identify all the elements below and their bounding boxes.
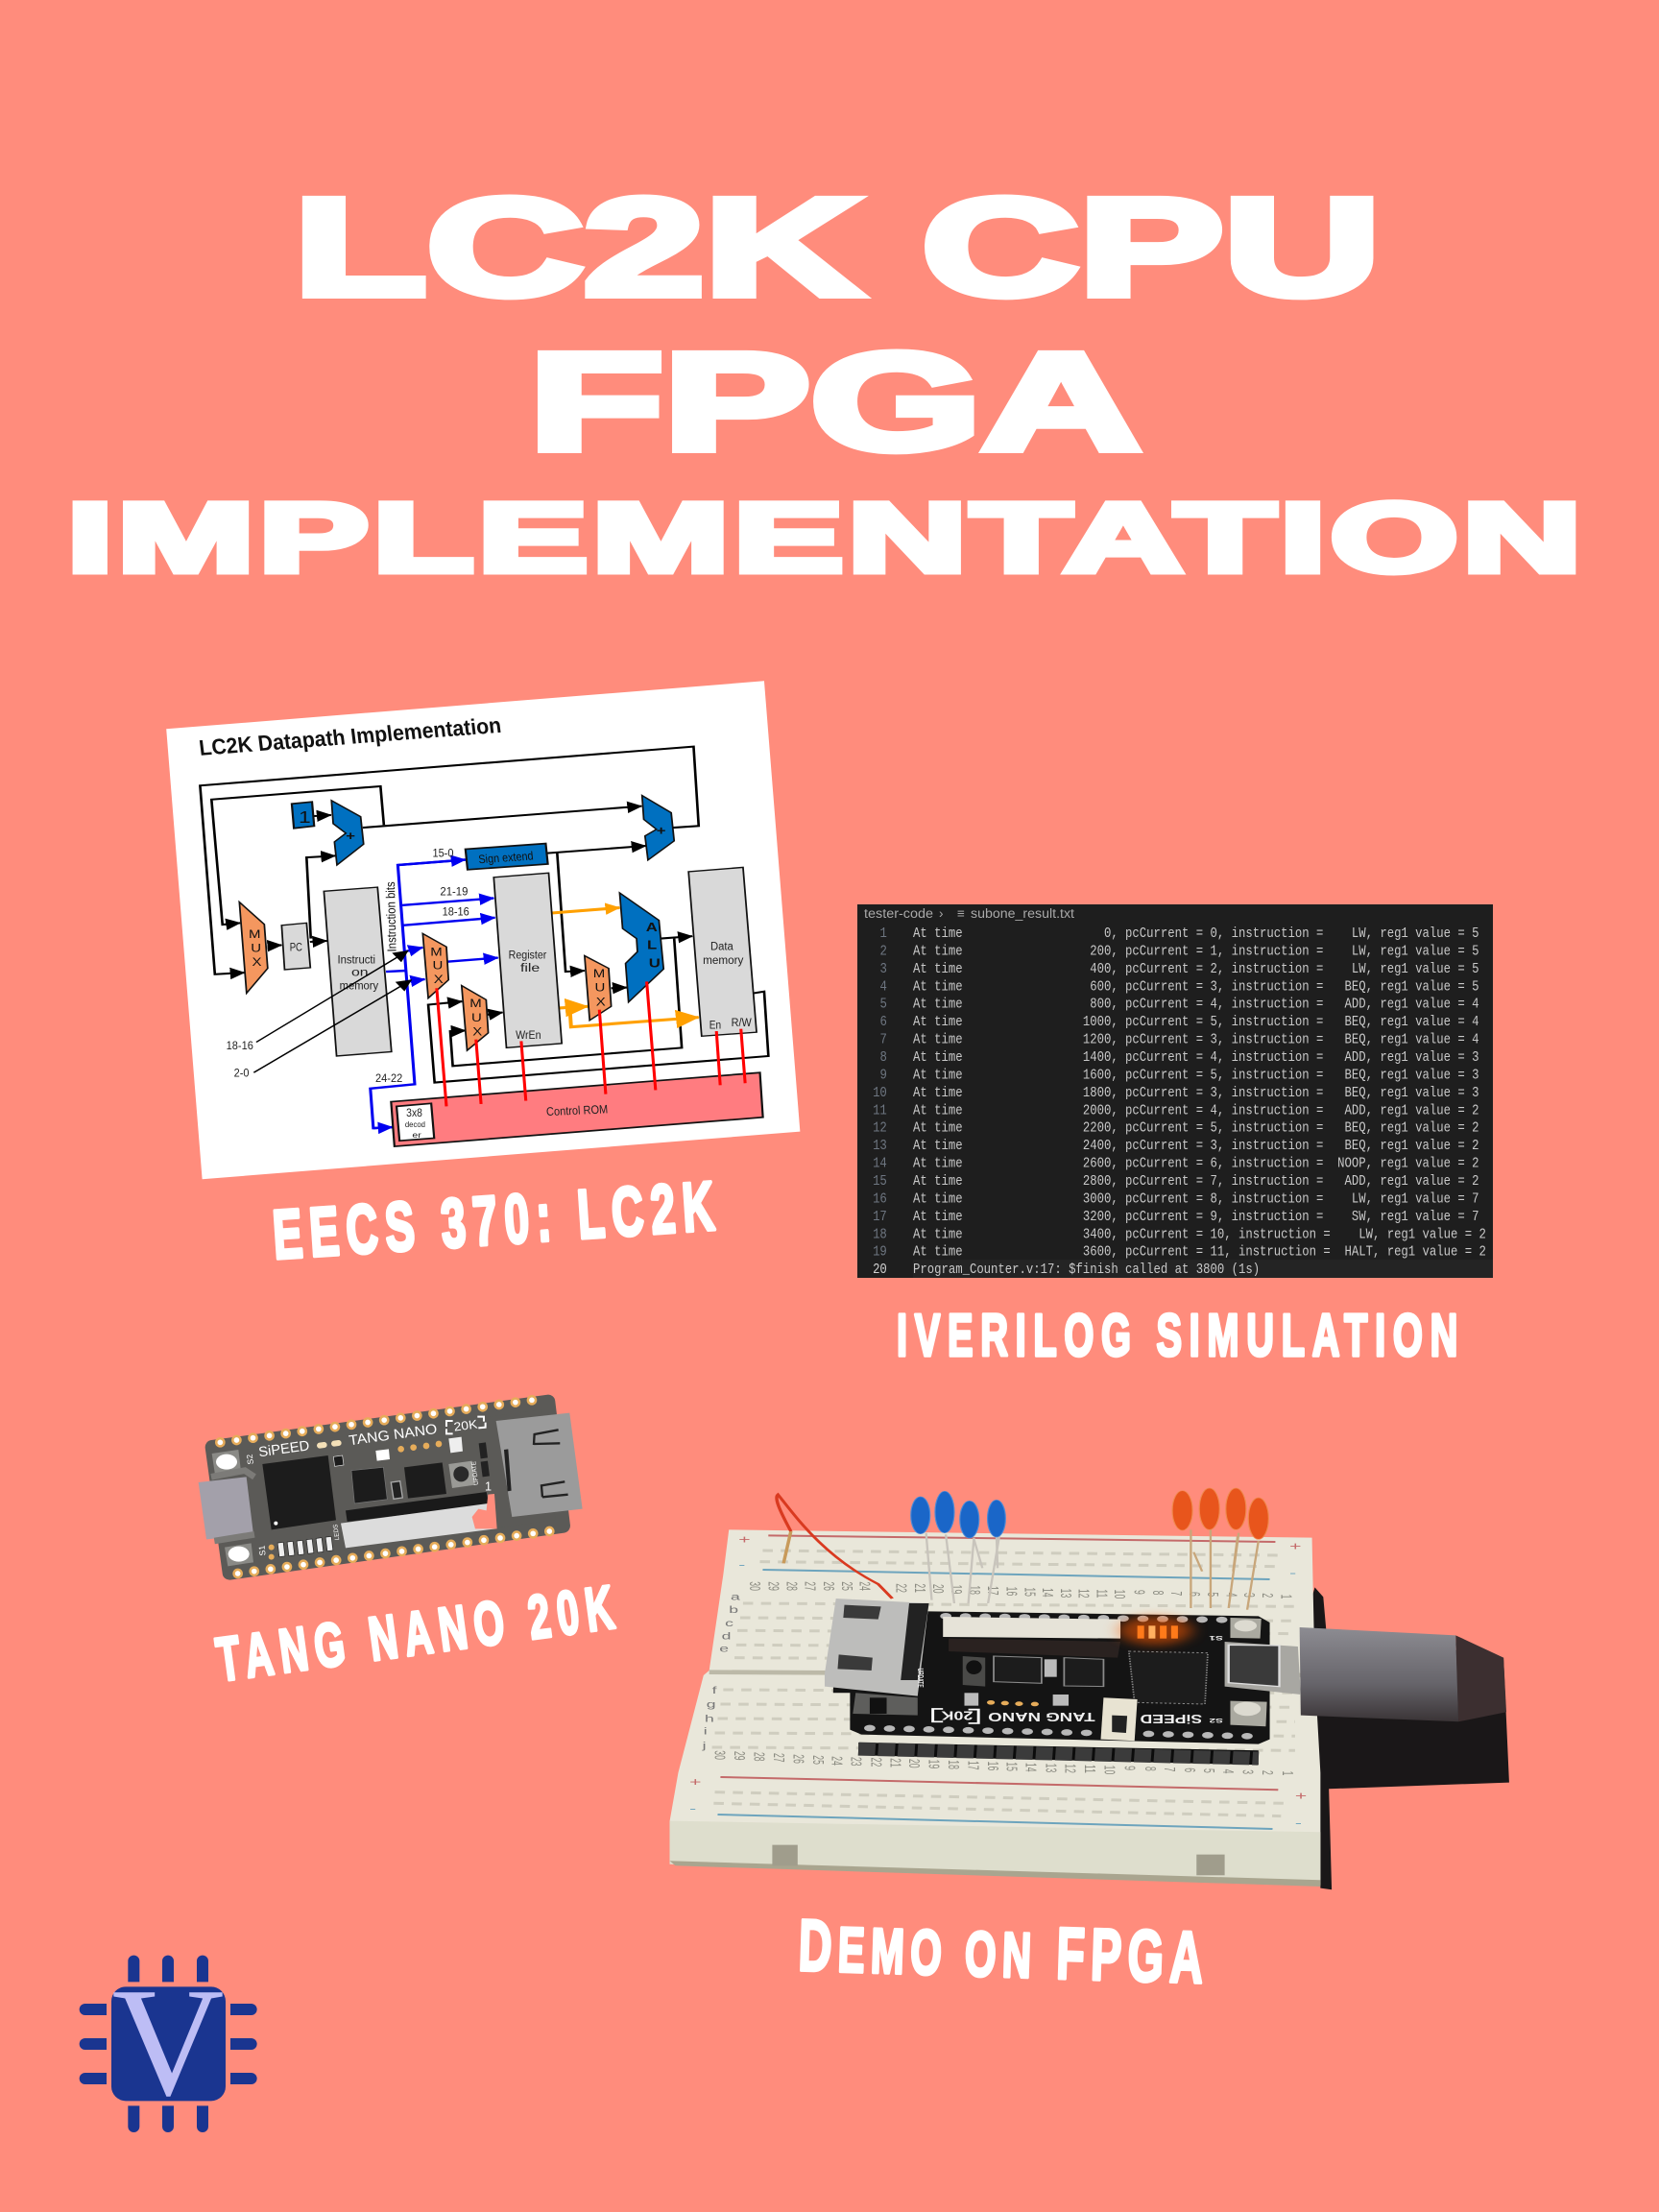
column numbers top: 5: [1204, 1592, 1221, 1597]
bit field labels: 15-0: [432, 847, 454, 860]
row letters: j: [701, 1741, 707, 1751]
line numbers: [873, 926, 887, 1279]
column numbers bottom: 24: [829, 1756, 845, 1766]
block: data memory: [688, 867, 757, 1036]
line numbers: 13: [873, 1139, 887, 1155]
board pin holes: [870, 1616, 1247, 1736]
letter V: V: [112, 1957, 224, 2128]
power rails: [717, 1535, 1278, 1829]
column numbers bottom: 17: [965, 1761, 981, 1770]
block: ALU: L: [647, 938, 657, 952]
front notches: [772, 1845, 1225, 1875]
block: ALU mux: M: [593, 967, 605, 980]
simulation log lines: At time 0, pcCurrent = 0, instruction = LW, reg1 value = 5: [913, 926, 1479, 942]
PCB: [212, 1402, 564, 1573]
memory chip: [351, 1467, 387, 1503]
block: register mux: U: [432, 959, 443, 972]
block: constant 1: [292, 802, 314, 829]
line numbers: 20: [873, 1262, 887, 1279]
silkscreen text, upside down: 20K: [941, 1709, 973, 1722]
column numbers top: 28: [783, 1581, 800, 1591]
column numbers top: 9: [1131, 1590, 1147, 1595]
column numbers bottom: 7: [1161, 1767, 1177, 1772]
block: control ROM: er: [412, 1131, 421, 1140]
simulation log lines: At time 200, pcCurrent = 1, instruction = LW, reg1 value = 5: [913, 945, 1479, 960]
silkscreen text: S2: [245, 1454, 255, 1465]
block: control ROM: Control ROM: [546, 1103, 609, 1119]
FPC connector: [341, 1492, 497, 1548]
simulation log lines: At time 2800, pcCurrent = 7, instruction = ADD, reg1 value = 2: [913, 1174, 1479, 1190]
column numbers top: 22: [893, 1583, 909, 1593]
column numbers bottom: 5: [1200, 1768, 1216, 1773]
active line highlight: [913, 1260, 1493, 1278]
row letters: b: [729, 1605, 738, 1616]
onboard LED glow: [1118, 1616, 1192, 1645]
update button: [963, 1656, 985, 1687]
column numbers top: 14: [1039, 1588, 1056, 1598]
title: [67, 170, 1586, 592]
block: write mux: [462, 986, 489, 1050]
channel between halves: [709, 1672, 1314, 1675]
label: instruction bits: Instruction bits: [383, 881, 399, 952]
JST connector: [1101, 1697, 1138, 1741]
block: data memory: Data: [710, 940, 733, 953]
column numbers top: 6: [1187, 1592, 1203, 1597]
column numbers bottom: 8: [1142, 1767, 1158, 1771]
flash chip: [404, 1462, 446, 1499]
row letters: f: [712, 1686, 717, 1696]
silkscreen text: SiPEED: [257, 1438, 310, 1460]
file breadcrumb: ≡: [957, 906, 965, 921]
chip body: [111, 1986, 226, 2101]
block: PC mux: U: [251, 942, 261, 954]
row letters: [701, 1592, 740, 1751]
black wires: [200, 747, 768, 1083]
bit field labels: 18-16: [443, 905, 469, 919]
column numbers top: 25: [838, 1581, 855, 1591]
rail signs: +: [1289, 1539, 1301, 1552]
rail signs: -: [1289, 1566, 1296, 1579]
column numbers bottom: 30: [711, 1750, 728, 1760]
title line: IMPLEMENTATION: IMPLEMENTATION: [67, 483, 1586, 592]
simulation log lines: [913, 926, 1486, 1279]
line numbers: 10: [873, 1086, 887, 1101]
column numbers bottom: 18: [945, 1760, 962, 1769]
label: Demo on FPGA: DEMO ON FPGA: [797, 1905, 1211, 1999]
block: data memory: R/W: [732, 1016, 752, 1029]
column numbers bottom: 25: [810, 1755, 827, 1765]
line numbers: 18: [873, 1228, 887, 1243]
column numbers top: 24: [856, 1581, 873, 1591]
HDMI connector: [496, 1413, 583, 1517]
column numbers top: 1: [1278, 1595, 1294, 1599]
line numbers: 12: [873, 1121, 887, 1137]
blue LEDs: [911, 1491, 1005, 1603]
panel: breadboard demo photo: [670, 1488, 1509, 1889]
block: PC mux: M: [249, 927, 260, 940]
rail signs: -: [689, 1801, 696, 1815]
FPC connector: [943, 1617, 1120, 1658]
bit field labels: 18-16: [227, 1040, 253, 1053]
block: register mux: [422, 933, 448, 998]
panel: iverilog simulation output: [857, 904, 1493, 1279]
block: register mux: X: [434, 974, 444, 986]
USB-C connector: [199, 1471, 254, 1541]
row letters: i: [704, 1726, 708, 1737]
column numbers top: 3: [1240, 1593, 1258, 1598]
column numbers bottom: 1: [1279, 1771, 1296, 1776]
tactile buttons S1 S2: [212, 1450, 253, 1566]
block: data memory: En: [709, 1019, 721, 1032]
block: branch adder: +: [657, 824, 666, 838]
row letters: c: [725, 1619, 733, 1629]
silkscreen text: 1: [485, 1480, 492, 1494]
column numbers top: 16: [1003, 1587, 1020, 1596]
simulation log lines: At time 2000, pcCurrent = 4, instruction = ADD, reg1 value = 2: [913, 1104, 1479, 1119]
simulation log lines: At time 3600, pcCurrent = 11, instruction = HALT, reg1 value = 2: [913, 1245, 1486, 1261]
column numbers bottom: 29: [731, 1751, 748, 1761]
red control lines: [437, 981, 745, 1106]
row letters: h: [705, 1714, 714, 1724]
terminal background: [857, 904, 1493, 1278]
silkscreen text: TANG NANO: [348, 1422, 438, 1449]
simulation log lines: At time 400, pcCurrent = 2, instruction = LW, reg1 value = 5: [913, 962, 1479, 977]
breadboard body: [670, 1529, 1320, 1885]
diagram heading: LC2K Datapath Implementation: [198, 712, 503, 760]
block: sign extend: [466, 844, 548, 870]
line numbers: 1: [879, 926, 887, 942]
silkscreen text, upside down: UPDATE: [915, 1669, 924, 1688]
simulation log lines: At time 1400, pcCurrent = 4, instruction = ADD, reg1 value = 3: [913, 1050, 1479, 1066]
line numbers: 17: [873, 1210, 887, 1225]
line numbers: 9: [879, 1069, 887, 1084]
column numbers bottom: 11: [1081, 1765, 1098, 1773]
line numbers: 2: [879, 945, 887, 960]
simulation log lines: At time 2200, pcCurrent = 5, instruction = BEQ, reg1 value = 2: [913, 1121, 1479, 1137]
block: write mux: M: [469, 997, 482, 1010]
block: register file: file: [520, 962, 540, 975]
paper: [166, 681, 800, 1179]
user LEDs: [277, 1536, 333, 1557]
bit field labels: 24-22: [375, 1071, 402, 1085]
gold pads: [987, 1700, 1039, 1706]
column numbers bottom: 2: [1259, 1770, 1275, 1775]
block: ALU: U: [649, 956, 661, 971]
simulation log lines: Program_Counter.v:17: $finish called at 3800 (1s): [913, 1262, 1260, 1279]
block: control ROM: decod: [405, 1120, 425, 1130]
column numbers bottom: 21: [887, 1758, 903, 1767]
row letters: g: [707, 1699, 716, 1710]
20K bracket: [933, 1709, 978, 1723]
column numbers bottom: 19: [926, 1760, 942, 1768]
pin header: [858, 1743, 1259, 1765]
blue wires: [371, 860, 498, 1128]
breadboard holes: [712, 1551, 1295, 1816]
tactile buttons: [1230, 1618, 1267, 1726]
column numbers top: 20: [930, 1584, 947, 1594]
block: PC adder: [331, 801, 364, 865]
column numbers bottom: 20: [905, 1759, 923, 1768]
silkscreen text: LEDS: [332, 1524, 341, 1541]
silkscreen text: [245, 1417, 492, 1556]
simulation log lines: At time 1200, pcCurrent = 3, instruction = BEQ, reg1 value = 4: [913, 1033, 1479, 1048]
block: PC mux: X: [252, 956, 262, 969]
column numbers bottom: 9: [1121, 1766, 1138, 1770]
label: EECS 370: LC2K: EECS 370: LC2K: [271, 1167, 724, 1274]
panel: Tang Nano 20K board render: [199, 1400, 583, 1574]
simulation log lines: At time 2600, pcCurrent = 6, instruction = NOOP, reg1 value = 2: [913, 1157, 1479, 1172]
simulation log lines: At time 600, pcCurrent = 3, instruction = BEQ, reg1 value = 5: [913, 980, 1479, 996]
line numbers: 19: [873, 1245, 887, 1261]
rail signs: -: [1295, 1815, 1302, 1829]
panel: LC2K datapath diagram: [166, 681, 800, 1179]
line numbers: 7: [879, 1033, 887, 1048]
simulation log lines: At time 3000, pcCurrent = 8, instruction = LW, reg1 value = 7: [913, 1192, 1479, 1208]
block: PC: PC: [290, 941, 302, 954]
title line: FPGA: FPGA: [529, 325, 1141, 479]
block: ALU mux: U: [594, 981, 605, 994]
block: register file: Register: [509, 949, 546, 962]
label: TANG NANO 20K: TANG NANO 20K: [212, 1572, 625, 1695]
USB-C connector: [1225, 1642, 1301, 1695]
20K bracket: [446, 1417, 486, 1433]
block: branch adder: [642, 796, 674, 860]
block: write mux: X: [472, 1025, 482, 1038]
line numbers: 3: [879, 962, 887, 977]
column numbers bottom: 22: [868, 1758, 884, 1767]
USB-C opening: [1229, 1645, 1280, 1687]
logo: chip with letter V: [80, 1956, 257, 2132]
rail signs: [689, 1532, 1307, 1829]
rail signs: +: [1295, 1789, 1307, 1802]
pin holes: [220, 1400, 550, 1574]
file breadcrumb: subone_result.txt: [971, 906, 1074, 921]
column numbers bottom: [711, 1750, 1296, 1776]
column numbers top: 30: [746, 1581, 762, 1591]
simulation log lines: At time 2400, pcCurrent = 3, instruction = BEQ, reg1 value = 2: [913, 1139, 1479, 1155]
silkscreen text: UPDATE: [470, 1460, 480, 1485]
title line: LC2K CPU: LC2K CPU: [294, 170, 1381, 325]
column numbers bottom: 28: [751, 1752, 767, 1762]
column numbers bottom: 10: [1101, 1766, 1118, 1774]
block: write mux: U: [471, 1011, 482, 1023]
block: data memory: memory: [703, 954, 744, 968]
column numbers top: 21: [911, 1583, 927, 1593]
gold pads: [269, 1441, 442, 1560]
block: control ROM: 3x8: [406, 1107, 422, 1119]
red jumper wire: [777, 1495, 892, 1599]
block: ALU: [619, 893, 663, 1002]
column numbers bottom: 26: [790, 1754, 806, 1764]
line numbers: 5: [879, 998, 887, 1013]
column numbers top: 13: [1057, 1589, 1073, 1598]
block: control ROM: [391, 1072, 763, 1146]
dark shadow behind board: [1312, 1587, 1509, 1889]
orange wires: [552, 907, 699, 1027]
line numbers: 6: [879, 1015, 887, 1031]
block: register file: WrEn: [516, 1029, 541, 1043]
silkscreen text, upside down: S2: [1209, 1717, 1223, 1724]
simulation log lines: At time 3400, pcCurrent = 10, instruction = LW, reg1 value = 2: [913, 1228, 1486, 1243]
column numbers top: 17: [984, 1586, 1001, 1596]
silkscreen text, upside down: S1: [1209, 1634, 1223, 1642]
block: ALU mux: X: [596, 996, 606, 1008]
column numbers bottom: 27: [770, 1753, 787, 1763]
diagonal immediate wires: [253, 950, 411, 1072]
block: register mux: M: [430, 946, 443, 958]
column numbers top: 19: [948, 1585, 965, 1594]
silkscreen text: S1: [256, 1545, 268, 1556]
column numbers bottom: 14: [1022, 1763, 1039, 1772]
line numbers: 4: [879, 980, 887, 996]
block: PC adder: +: [346, 829, 355, 843]
column numbers top: 7: [1167, 1591, 1184, 1596]
HDMI socket: [825, 1599, 929, 1716]
column numbers bottom: 3: [1239, 1769, 1256, 1774]
chip pins: [80, 1956, 257, 2132]
breadboard front face: [670, 1821, 1320, 1885]
column numbers top: 15: [1022, 1587, 1038, 1597]
line numbers: 14: [873, 1157, 887, 1172]
column numbers top: 10: [1111, 1590, 1128, 1599]
block: register file: [493, 873, 562, 1047]
column numbers top: 18: [966, 1585, 982, 1595]
column numbers top: 29: [765, 1581, 781, 1591]
row letters: a: [731, 1592, 740, 1602]
block: constant 1: 1: [299, 807, 311, 827]
small components: [333, 1437, 490, 1499]
update button: [448, 1461, 475, 1488]
silkscreen text, upside down: TANG NANO: [988, 1710, 1095, 1723]
column numbers bottom: 15: [1003, 1762, 1020, 1771]
column numbers top: 8: [1149, 1591, 1166, 1596]
simulation log lines: At time 1600, pcCurrent = 5, instruction = BEQ, reg1 value = 3: [913, 1069, 1479, 1084]
column numbers bottom: 4: [1219, 1769, 1236, 1774]
block: PC mux: [239, 902, 268, 993]
simulation log lines: At time 3200, pcCurrent = 9, instruction = SW, reg1 value = 7: [913, 1210, 1479, 1225]
column numbers top: 12: [1075, 1589, 1092, 1599]
column numbers bottom: 16: [984, 1762, 1001, 1770]
FPGA board: [833, 1606, 1270, 1744]
silkscreen text, upside down: [915, 1634, 1223, 1725]
USB cable plug: [1300, 1627, 1506, 1721]
rail signs: -: [738, 1557, 745, 1571]
bit field labels: [227, 847, 469, 1085]
column numbers top: 27: [802, 1581, 818, 1591]
rail signs: +: [689, 1775, 701, 1789]
block: sign extend: Sign extend: [478, 850, 534, 867]
main FPGA chip: [262, 1455, 336, 1529]
rail signs: +: [738, 1532, 751, 1546]
file breadcrumb: ›: [939, 906, 943, 921]
row letters: d: [722, 1631, 731, 1642]
simulation log lines: At time 1000, pcCurrent = 5, instruction = BEQ, reg1 value = 4: [913, 1015, 1479, 1031]
block: instruction memory: on: [351, 966, 369, 979]
line numbers: 15: [873, 1174, 887, 1190]
block: instruction memory: [324, 887, 392, 1056]
bit field labels: 21-19: [440, 885, 469, 899]
column numbers top: 2: [1259, 1593, 1275, 1598]
block: ALU mux: [585, 955, 612, 1021]
column numbers top: 11: [1094, 1589, 1110, 1598]
file breadcrumb: tester-code: [864, 906, 933, 921]
row letters: e: [719, 1644, 729, 1654]
column numbers bottom: 13: [1043, 1764, 1059, 1772]
orange LEDs: [1172, 1488, 1268, 1610]
simulation log lines: At time 800, pcCurrent = 4, instruction = ADD, reg1 value = 4: [913, 998, 1479, 1013]
silkscreen text, upside down: SiPEED: [1141, 1712, 1202, 1725]
silver components: [965, 1659, 1069, 1706]
line numbers: 8: [879, 1050, 887, 1066]
column numbers bottom: 23: [848, 1757, 864, 1767]
block: PC: [281, 923, 310, 970]
breadboard bottom edge: [670, 1861, 1320, 1887]
column numbers top: 26: [820, 1581, 836, 1591]
chips: [994, 1651, 1208, 1704]
column numbers bottom: 6: [1181, 1767, 1197, 1772]
bit field labels: 2-0: [234, 1067, 250, 1080]
block: ALU: A: [646, 921, 658, 934]
simulation log lines: At time 1800, pcCurrent = 3, instruction = BEQ, reg1 value = 3: [913, 1086, 1479, 1101]
column numbers top: [746, 1581, 1294, 1599]
file breadcrumb: [864, 906, 1074, 921]
column numbers bottom: 12: [1062, 1764, 1078, 1773]
block: instruction memory: Instructi: [337, 953, 375, 967]
line numbers: 16: [873, 1192, 887, 1208]
block: instruction memory: memory: [340, 979, 379, 993]
line numbers: 11: [873, 1104, 887, 1119]
column numbers top: 4: [1223, 1593, 1239, 1598]
silkscreen text: 20K: [453, 1417, 479, 1434]
